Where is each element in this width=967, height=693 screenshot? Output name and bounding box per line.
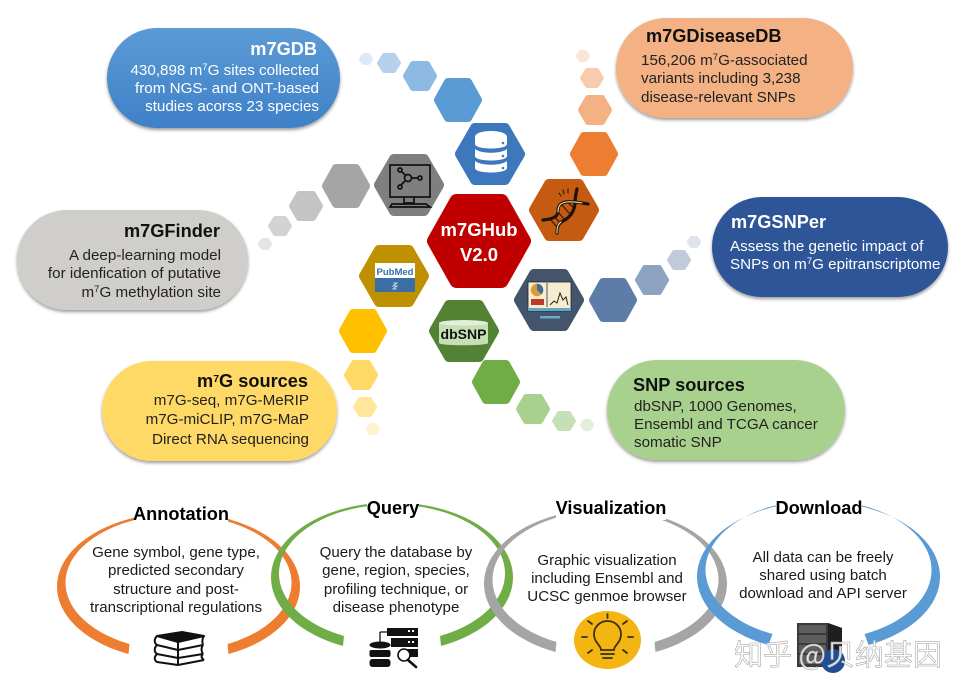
section: query: Query the database by [320, 544, 473, 561]
center hexagon: m7GHub V2.0 [434, 201, 524, 281]
panel: m7GDB: from NGS- and ONT-based [135, 80, 319, 97]
panel: m7GFinder: m7GFinder [124, 221, 220, 241]
panel: m7G sources: 7 [213, 373, 219, 385]
center hexagon: m7GHub V2.0: V2.0 [460, 244, 498, 265]
section: query: profiling technique, or [324, 581, 468, 598]
hexagon chain: green [476, 364, 591, 429]
section: visualization: Visualization [556, 498, 666, 518]
icon: dbSNP hexagon: dbSNP [441, 326, 486, 342]
section: download: Download [776, 498, 862, 518]
panel: SNP sources: dbSNP, 1000 Genomes, [634, 398, 797, 415]
section: download: download and API server [739, 585, 907, 602]
hexagon chain: navy [593, 239, 698, 318]
section: download: shared using batch [759, 567, 887, 584]
panel: m7GDiseaseDB [616, 18, 853, 118]
panel: m7GSNPer: SNPs on m [730, 256, 807, 273]
section: annotation: structure and post- [113, 581, 239, 598]
hexagon chain: orange [574, 53, 614, 172]
watermark logo [821, 649, 845, 673]
panel: m7GDB: m7GDB [250, 39, 317, 59]
section: annotation [90, 504, 262, 616]
ring: annotation [57, 513, 300, 654]
panel: m7G sources: Direct RNA sequencing [152, 431, 309, 448]
center hexagon: m7GHub V2.0: m7GHub [440, 219, 518, 240]
ring: visualization [484, 509, 727, 652]
icon: dashboard monitor hexagon [519, 274, 579, 326]
panel: m7GFinder: G methylation site [99, 284, 221, 301]
panel: m7G sources: m [197, 371, 213, 391]
panel: SNP sources: SNP sources [633, 375, 745, 395]
panel: m7GDiseaseDB: variants including 3,238 [641, 70, 801, 87]
panel: m7GDiseaseDB: disease-relevant SNPs [641, 89, 796, 106]
icon: PubMed hexagon: PubMed [377, 267, 414, 278]
section: download: All data can be freely [753, 549, 894, 566]
panel: SNP sources: somatic SNP [634, 434, 722, 451]
ring: download [697, 500, 940, 645]
panel: m7GFinder: 7 [94, 284, 99, 295]
panel: m7G sources: m7G-seq, m7G-MeRIP [154, 392, 309, 409]
panel: m7GDB: G sites collected [208, 62, 319, 79]
icon: database search [370, 628, 418, 667]
panel: m7GSNPer: G epitranscriptome [812, 256, 940, 273]
section: visualization: Graphic visualization [537, 552, 677, 569]
panel: m7GDiseaseDB: G-associated [718, 52, 808, 69]
panel: m7GSNPer: Assess the genetic impact of [730, 238, 924, 255]
icon: dbSNP hexagon [434, 305, 494, 357]
section: query: disease phenotype [333, 599, 459, 616]
panel: m7G sources: m7G-miCLIP, m7G-MaP [146, 411, 309, 428]
panel: m7GDB: 430,898 m [130, 62, 202, 79]
section: query: gene, region, species, [322, 562, 470, 579]
section: visualization [527, 498, 687, 605]
section: annotation: predicted secondary [108, 562, 244, 579]
panel: m7GDB: 7 [202, 62, 208, 73]
section: query: Query [367, 498, 420, 518]
panel: m7GDiseaseDB: 156,206 m [641, 52, 713, 69]
icon: lightbulb [574, 611, 641, 669]
section: query [320, 498, 473, 616]
panel: m7GDB: studies acorss 23 species [145, 98, 319, 115]
icon: database hexagon [460, 128, 520, 180]
panel: m7GFinder: m [81, 284, 94, 301]
section: visualization: UCSC genmoe browser [527, 588, 687, 605]
hexagon chain: yellow [343, 313, 383, 432]
panel: m7GSNPer [712, 197, 948, 297]
section: annotation: Gene symbol, gene type, [92, 544, 260, 561]
panel: m7GFinder [17, 210, 248, 310]
panel: m7GFinder: A deep-learning model [69, 247, 221, 264]
panel: m7GDiseaseDB: 7 [713, 52, 718, 63]
section: visualization: including Ensembl and [531, 570, 683, 587]
panel: m7GSNPer: 7 [807, 256, 812, 267]
panel: m7G sources [102, 361, 337, 461]
icon: books [155, 632, 204, 665]
panel: m7GDiseaseDB: m7GDiseaseDB [646, 26, 781, 46]
section: annotation: transcriptional regulations [90, 599, 262, 616]
ring: query [271, 502, 513, 646]
section: download [739, 498, 907, 602]
icon: computer network hexagon [379, 159, 439, 211]
icon: DNA hexagon [534, 184, 594, 236]
panel: SNP sources [607, 360, 845, 460]
hexagon chain: gray [261, 168, 366, 247]
panel: m7GSNPer: m7GSNPer [731, 212, 826, 232]
hexagon chain: blue [362, 55, 478, 118]
section: annotation: Annotation [133, 504, 229, 524]
panel: m7GDB [107, 28, 340, 128]
watermark: 知乎 @贝纳基因 [734, 632, 942, 674]
panel: m7GFinder: for idenfication of putative [48, 265, 221, 282]
panel: SNP sources: Ensembl and TCGA cancer [634, 416, 818, 433]
icon: PubMed hexagon [364, 250, 424, 302]
panel: m7G sources: G sources [219, 371, 308, 391]
icon: server rack [797, 623, 842, 667]
